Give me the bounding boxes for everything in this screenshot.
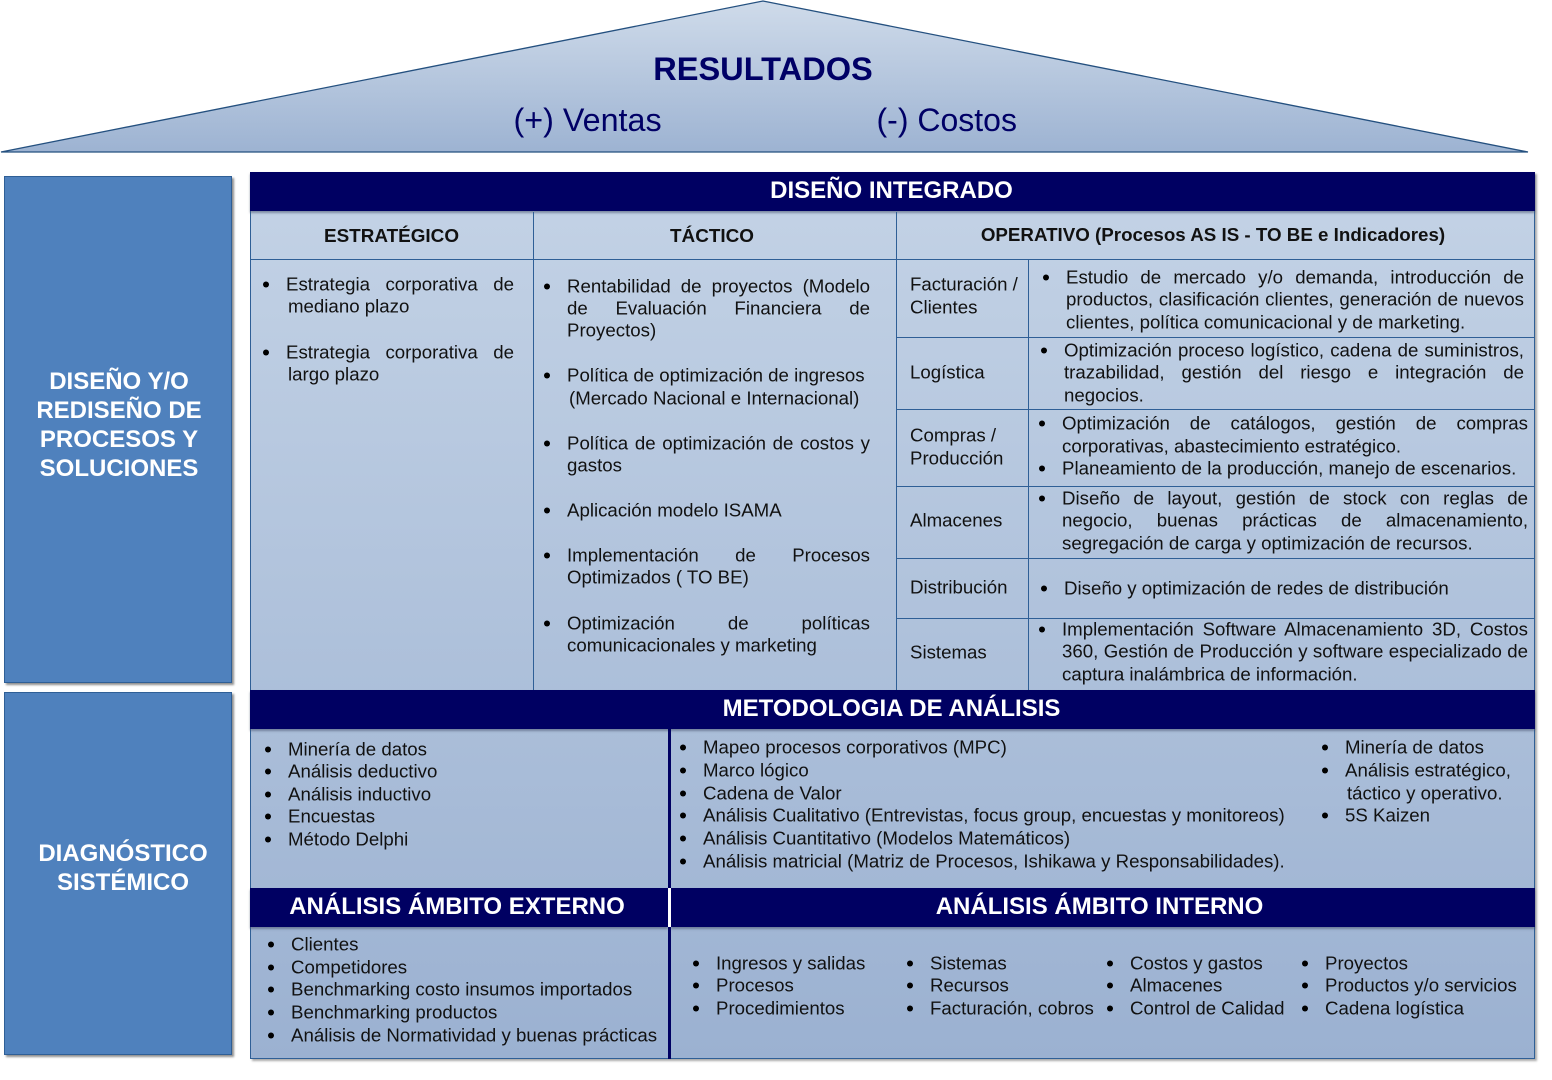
side panel: diseño y/o rediseño: PROCESOS Y	[40, 426, 198, 453]
panel: metodología derecha: Análisis Cuantitativo (Modelos Matemáticos)	[703, 828, 1070, 848]
panel: ámbito interno list: Cadena logística	[1325, 998, 1464, 1018]
operativo row: logística	[897, 338, 1535, 410]
operativo row: logística: trazabilidad, gestión del riesgo e integración de	[1064, 362, 1524, 382]
side panel: diagnóstico sistémico	[4, 692, 232, 1055]
panel: estratégico list	[263, 274, 514, 384]
panel: ámbito interno list: Procesos	[716, 974, 794, 996]
panel: metodología izquierda: Método Delphi	[288, 828, 408, 850]
heading: diseño integrado	[250, 172, 1535, 211]
panel: metodología derecha: Minería de datos	[1345, 736, 1484, 758]
side panel: diagnóstico sistémico: SISTÉMICO	[57, 869, 189, 896]
operativo row: sistemas: Sistemas	[910, 642, 987, 662]
panel: táctico list: (Mercado Nacional e Internacional)	[569, 388, 859, 408]
operativo row: logística: Logística	[910, 362, 985, 382]
panel: metodología derecha: Marco lógico	[703, 760, 809, 780]
operativo row: almacenes: Almacenes	[910, 510, 1002, 530]
side panel: diseño y/o rediseño: REDISEÑO DE	[36, 397, 202, 424]
roof: resultados: RESULTADOS	[653, 50, 873, 87]
panel: táctico list: Implementación de Procesos	[567, 544, 870, 566]
panel: táctico list: Optimización de políticas	[567, 612, 870, 634]
panel: ámbito interno list	[693, 952, 1517, 1018]
panel: táctico list: Optimizados ( TO BE)	[567, 566, 749, 588]
side panel: diseño y/o rediseño: DISEÑO Y/O	[49, 368, 189, 395]
panel: táctico list: Política de optimización de costos y	[567, 432, 870, 454]
panel: táctico list: Proyectos)	[567, 320, 656, 340]
operativo row: sistemas: Implementación Software Almacenamiento 3D, Costos	[1062, 618, 1528, 640]
operativo row: almacenes: Diseño de layout, gestión de stock con reglas de	[1062, 488, 1528, 508]
panel: ámbito interno list: Costos y gastos	[1130, 952, 1263, 974]
operativo row: compras: Optimización de catálogos, gestión de compras	[1062, 412, 1528, 434]
panel: metodología derecha: táctico y operativo.	[1347, 782, 1503, 804]
panel: ámbito interno list: Sistemas	[930, 952, 1007, 974]
panel: ámbito externo list	[268, 934, 657, 1046]
panel: metodología izquierda: Minería de datos	[288, 738, 427, 760]
roof: resultados: (-) Costos	[876, 102, 1017, 138]
panel: estratégico list: mediano plazo	[288, 296, 409, 316]
panel: metodología derecha: Análisis Cualitativo (Entrevistas, focus group, encuestas y monitoreos)	[703, 804, 1285, 826]
header: estratégico: ESTRATÉGICO	[324, 226, 459, 247]
side panel: diseño y/o rediseño: SOLUCIONES	[40, 455, 198, 482]
panel: táctico list: gastos	[567, 454, 622, 476]
panel: ámbito interno list: Facturación, cobros	[930, 998, 1094, 1018]
panel: ámbito externo list: Benchmarking productos	[291, 1002, 497, 1022]
operativo row: distribución: Distribución	[910, 576, 1007, 598]
operativo row: sistemas: 360, Gestión de Producción y software especializado de	[1062, 640, 1528, 662]
panel: ámbito interno list: Recursos	[930, 974, 1009, 996]
panel: metodología derecha: Análisis estratégico,	[1345, 760, 1511, 780]
panel: ámbito interno list: Ingresos y salidas	[716, 952, 865, 974]
panel: ámbito externo list: Benchmarking costo insumos importados	[291, 978, 632, 1000]
operativo row: almacenes	[897, 487, 1535, 559]
panel: metodología derecha: Análisis matricial (Matriz de Procesos, Ishikawa y Responsabilidades).	[703, 850, 1285, 872]
heading: metodología de análisis	[250, 690, 1535, 729]
header: táctico: TÁCTICO	[670, 226, 754, 247]
operativo row: almacenes: negocio, buenas prácticas de almacenamiento,	[1062, 510, 1528, 530]
operativo row: sistemas	[910, 618, 1528, 684]
panel: táctico list: Aplicación modelo ISAMA	[567, 500, 782, 520]
operativo row: facturación: clientes, política comunicacional y de marketing.	[1066, 312, 1465, 332]
main panel background	[250, 172, 1535, 1059]
heading: metodología de análisis: METODOLOGIA DE ANÁLISIS	[723, 695, 1060, 722]
panel: metodología derecha	[680, 736, 1511, 872]
panel: ámbito interno list: Procedimientos	[716, 998, 845, 1018]
column header row	[251, 212, 1535, 260]
panel: táctico list: de Evaluación Financiera de	[567, 298, 870, 318]
operativo row: almacenes: segregación de carga y optimización de recursos.	[1062, 532, 1473, 554]
panel: ámbito interno list: Almacenes	[1130, 974, 1222, 996]
operativo row: compras: corporativas, abastecimiento estratégico.	[1062, 436, 1401, 456]
operativo row: sistemas: captura inalámbrica de información.	[1062, 664, 1358, 684]
heading: análisis ámbito externo	[250, 888, 668, 927]
operativo row: compras: Planeamiento de la producción, manejo de escenarios.	[1062, 458, 1516, 478]
panel: táctico list	[544, 276, 870, 656]
panel: metodología derecha: Cadena de Valor	[703, 782, 842, 804]
heading: diseño integrado: DISEÑO INTEGRADO	[770, 177, 1013, 204]
heading: análisis ámbito interno	[671, 888, 1535, 927]
side panel: diagnóstico sistémico: DIAGNÓSTICO	[38, 840, 208, 867]
header: operativo: OPERATIVO (Procesos AS IS - TO BE e Indicadores)	[981, 224, 1445, 245]
operativo row: distribución	[897, 559, 1535, 619]
panel: metodología derecha: Mapeo procesos corporativos (MPC)	[703, 736, 1007, 758]
panel: ámbito interno list: Control de Calidad	[1130, 998, 1285, 1018]
panel: táctico list: Rentabilidad de proyectos (Modelo	[567, 276, 870, 296]
panel: ámbito interno list: Proyectos	[1325, 952, 1408, 974]
panel: ámbito externo list: Competidores	[291, 956, 407, 978]
operativo row: facturación	[897, 260, 1535, 338]
side panel: diseño y/o rediseño	[4, 176, 232, 683]
operativo row: facturación: productos, clasificación clientes, generación de nuevos	[1066, 288, 1524, 310]
operativo row: facturación: Facturación /	[910, 274, 1018, 294]
panel: metodología izquierda	[265, 738, 437, 850]
roof: resultados: (+) Ventas	[514, 102, 662, 138]
operativo row: facturación: Clientes	[910, 296, 977, 318]
panel: metodología izquierda: Análisis inductivo	[288, 784, 431, 804]
panel: metodología izquierda: Encuestas	[288, 806, 375, 826]
panel: metodología derecha: 5S Kaizen	[1345, 804, 1430, 826]
operativo row: compras: Producción	[910, 448, 1003, 468]
panel: estratégico list: Estrategia corporativa de	[286, 274, 514, 294]
panel: estratégico list: largo plazo	[288, 364, 379, 384]
operativo row: logística: negocios.	[1064, 384, 1144, 406]
panel: metodología izquierda: Análisis deductivo	[288, 760, 437, 782]
operativo row: compras: Compras /	[910, 424, 996, 446]
heading: análisis ámbito interno: ANÁLISIS ÁMBITO INTERNO	[936, 893, 1263, 920]
operativo row: compras	[897, 410, 1535, 487]
panel: estratégico list: Estrategia corporativa de	[286, 342, 514, 362]
panel: táctico list: Política de optimización de ingresos	[567, 364, 865, 386]
panel: ámbito externo list: Análisis de Normatividad y buenas prácticas	[291, 1024, 657, 1046]
panel: ámbito interno list: Productos y/o servicios	[1325, 974, 1517, 996]
operativo row: logística: Optimización proceso logístico, cadena de suministros,	[1064, 340, 1524, 360]
roof: resultados	[0, 0, 1528, 153]
heading: análisis ámbito externo: ANÁLISIS ÁMBITO EXTERNO	[289, 893, 625, 920]
panel: táctico list: comunicacionales y marketing	[567, 634, 817, 656]
operativo row: distribución: Diseño y optimización de redes de distribución	[1064, 578, 1449, 598]
operativo row: facturación: Estudio de mercado y/o demanda, introducción de	[1066, 266, 1524, 288]
panel: ámbito externo list: Clientes	[291, 934, 358, 954]
